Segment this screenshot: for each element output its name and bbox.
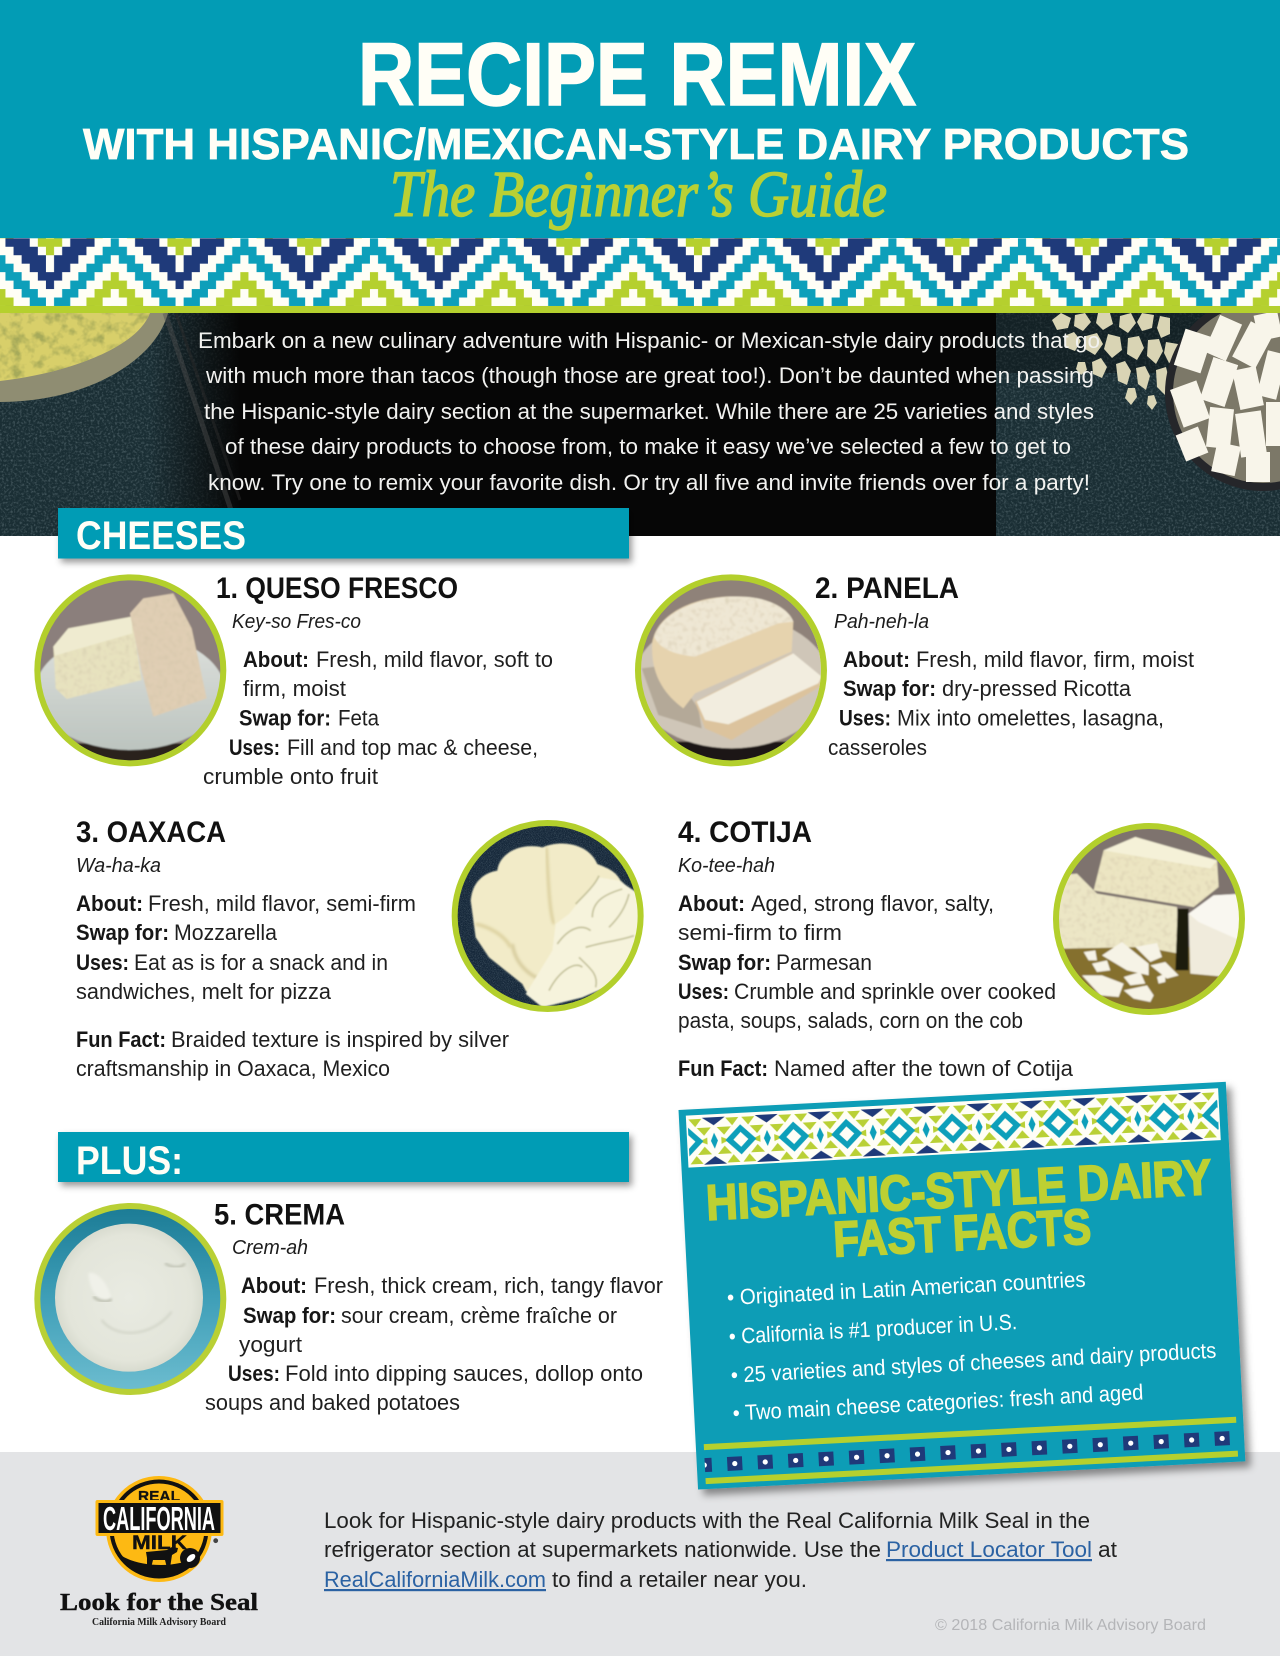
text: panela: Fresh, mild flavor, firm, moist xyxy=(916,647,1194,672)
text: crema: yogurt xyxy=(239,1332,302,1357)
seal organization name: California Milk Advisory Board xyxy=(92,1617,226,1628)
subtitle: WITH HISPANIC/MEXICAN-STYLE DAIRY PRODUCTS xyxy=(83,120,1189,169)
photo: queso fresco xyxy=(34,574,226,766)
text: queso fresco: Key-so Fres-co xyxy=(232,611,361,633)
script subtitle: The Beginner’s Guide xyxy=(390,158,887,231)
photo: cotija xyxy=(1053,823,1245,1015)
text: cotija xyxy=(678,816,1074,1081)
intro paragraph: Embark on a new culinary adventure with Hispanic- or Mexican-style dairy products that go xyxy=(198,328,1100,353)
card bullet list: • 25 varieties and styles of cheeses and dairy products xyxy=(730,1338,1217,1388)
footer paragraph: to find a retailer near you. xyxy=(552,1567,807,1592)
card bullet list: • California is #1 producer in U.S. xyxy=(728,1309,1018,1349)
text: queso fresco: Fresh, mild flavor, soft to xyxy=(316,647,553,672)
text: crema: sour cream, crème fraîche or xyxy=(341,1303,617,1328)
zigzag pattern band xyxy=(0,238,1280,314)
text: queso fresco: Swap for: xyxy=(239,706,331,730)
seal tagline: Look for the Seal xyxy=(60,1590,258,1616)
photo: oaxaca xyxy=(452,820,644,1012)
text: panela: 2. PANELA xyxy=(815,572,959,605)
card bullet list xyxy=(726,1260,1219,1426)
copyright: © 2018 California Milk Advisory Board xyxy=(935,1617,1206,1634)
footer paragraph: RealCaliforniaMilk.com xyxy=(324,1567,546,1592)
photo: guacamole bowl xyxy=(0,313,240,525)
card bullet list: • Two main cheese categories: fresh and aged xyxy=(732,1379,1144,1426)
text: crema xyxy=(205,1198,663,1415)
text: oaxaca: Fun Fact: xyxy=(76,1027,166,1052)
text: oaxaca: Eat as is for a snack and in xyxy=(134,950,388,975)
text: oaxaca: Braided texture is inspired by silver xyxy=(171,1027,509,1052)
text: crema: Crem-ah xyxy=(232,1237,308,1259)
title: RECIPE REMIX xyxy=(358,24,916,124)
footer paragraph xyxy=(324,1508,1117,1592)
text: queso fresco xyxy=(203,572,553,789)
logo: Real California Milk seal: REAL xyxy=(138,1488,180,1505)
text: cotija: Crumble and sprinkle over cooked xyxy=(734,979,1056,1004)
text: oaxaca: Swap for: xyxy=(76,920,169,945)
text: oaxaca: craftsmanship in Oaxaca, Mexico xyxy=(76,1056,390,1081)
text: cotija: Fun Fact: xyxy=(678,1056,768,1081)
logo: Real California Milk seal: CALIFORNIA xyxy=(103,1500,215,1537)
intro band with food photo background xyxy=(0,295,1280,536)
intro paragraph xyxy=(198,328,1100,495)
card bottom stripe decoration xyxy=(696,1417,1238,1485)
intro paragraph: with much more than tacos (though those are great too!). Don’t be daunted when passing xyxy=(205,363,1094,388)
text: cotija: About: xyxy=(678,891,745,916)
text: panela: Pah-neh-la xyxy=(834,611,929,633)
text: queso fresco: crumble onto fruit xyxy=(203,764,378,789)
footer paragraph: Product Locator Tool xyxy=(886,1537,1092,1562)
card heading xyxy=(705,1149,1215,1274)
footer band xyxy=(0,1452,1280,1656)
text: queso fresco: Feta xyxy=(338,706,380,730)
text: crema: About: xyxy=(241,1273,307,1298)
section heading: plus xyxy=(58,1132,629,1183)
card heading: HISPANIC-STYLE DAIRY xyxy=(705,1149,1213,1231)
text: panela: About: xyxy=(843,647,910,672)
footer paragraph: refrigerator section at supermarkets nationwide. Use the xyxy=(324,1537,881,1562)
text: queso fresco: firm, moist xyxy=(243,676,346,701)
card pattern strip xyxy=(686,1088,1221,1168)
intro paragraph: the Hispanic-style dairy section at the supermarket. While there are 25 varieties and styles xyxy=(204,399,1094,424)
text: cotija: semi-firm to firm xyxy=(678,920,842,945)
text: crema: soups and baked potatoes xyxy=(205,1390,460,1415)
header banner xyxy=(0,0,1280,238)
text: oaxaca: Wa-ha-ka xyxy=(76,855,161,877)
section heading: cheeses xyxy=(58,508,629,558)
text: crema: Swap for: xyxy=(243,1303,336,1328)
photo: crumbled cheese xyxy=(1052,313,1180,410)
text: queso fresco: 1. QUESO FRESCO xyxy=(216,572,458,605)
text: cotija: Parmesan xyxy=(776,950,872,975)
text: crema: Uses: xyxy=(228,1361,280,1386)
intro paragraph: of these dairy products to choose from, to make it easy we’ve selected a few to get to xyxy=(225,434,1071,459)
text: cotija: 4. COTIJA xyxy=(678,816,812,849)
text: oaxaca xyxy=(76,816,509,1081)
logo: Real California Milk seal xyxy=(60,1476,258,1628)
logo: Real California Milk seal: MILK xyxy=(132,1533,187,1554)
text: cotija: Named after the town of Cotija xyxy=(774,1056,1074,1081)
text: panela: Swap for: xyxy=(843,676,936,701)
card bullet list: • Originated in Latin American countries xyxy=(726,1267,1086,1310)
icon: sun xyxy=(180,1548,200,1568)
footer paragraph: at xyxy=(1098,1537,1117,1562)
icon: cow xyxy=(146,1547,178,1568)
text: oaxaca: Mozzarella xyxy=(174,920,278,945)
photo: crema xyxy=(37,1206,223,1392)
panel: fast facts card xyxy=(678,1082,1245,1489)
text: crema: 5. CREMA xyxy=(214,1198,345,1232)
text: crema: Fresh, thick cream, rich, tangy flavor xyxy=(314,1273,663,1298)
text: cotija: Uses: xyxy=(678,979,729,1004)
text: panela: Uses: xyxy=(839,706,891,730)
text: queso fresco: Fill and top mac & cheese, xyxy=(287,735,538,760)
text: oaxaca: sandwiches, melt for pizza xyxy=(76,979,332,1004)
text: crema: Fold into dipping sauces, dollop onto xyxy=(285,1361,643,1386)
text: queso fresco: Uses: xyxy=(229,735,280,760)
text: queso fresco: About: xyxy=(243,647,309,672)
intro paragraph: know. Try one to remix your favorite dish. Or try all five and invite friends over for a party! xyxy=(208,470,1090,495)
text: cotija: Aged, strong flavor, salty, xyxy=(751,891,994,916)
text: panela: Mix into omelettes, lasagna, xyxy=(897,706,1164,730)
text: cotija: pasta, soups, salads, corn on the cob xyxy=(678,1008,1023,1033)
text: oaxaca: 3. OAXACA xyxy=(76,816,226,849)
text: panela: casseroles xyxy=(828,735,927,760)
footer paragraph: Look for Hispanic-style dairy products with the Real California Milk Seal in the xyxy=(324,1508,1090,1533)
photo: panela xyxy=(635,574,827,766)
text: cotija: Swap for: xyxy=(678,950,771,975)
text: cotija: Ko-tee-hah xyxy=(678,855,775,877)
text: panela xyxy=(815,572,1194,760)
text: oaxaca: About: xyxy=(76,891,143,916)
text: panela: dry-pressed Ricotta xyxy=(942,676,1132,701)
photo: bowl of cheese cubes xyxy=(1165,295,1280,491)
card heading: FAST FACTS xyxy=(832,1198,1092,1268)
text: oaxaca: Fresh, mild flavor, semi-firm xyxy=(148,891,416,916)
section heading: plus: PLUS: xyxy=(76,1139,183,1183)
text: oaxaca: Uses: xyxy=(76,950,129,975)
section heading: cheeses: CHEESES xyxy=(76,514,246,558)
